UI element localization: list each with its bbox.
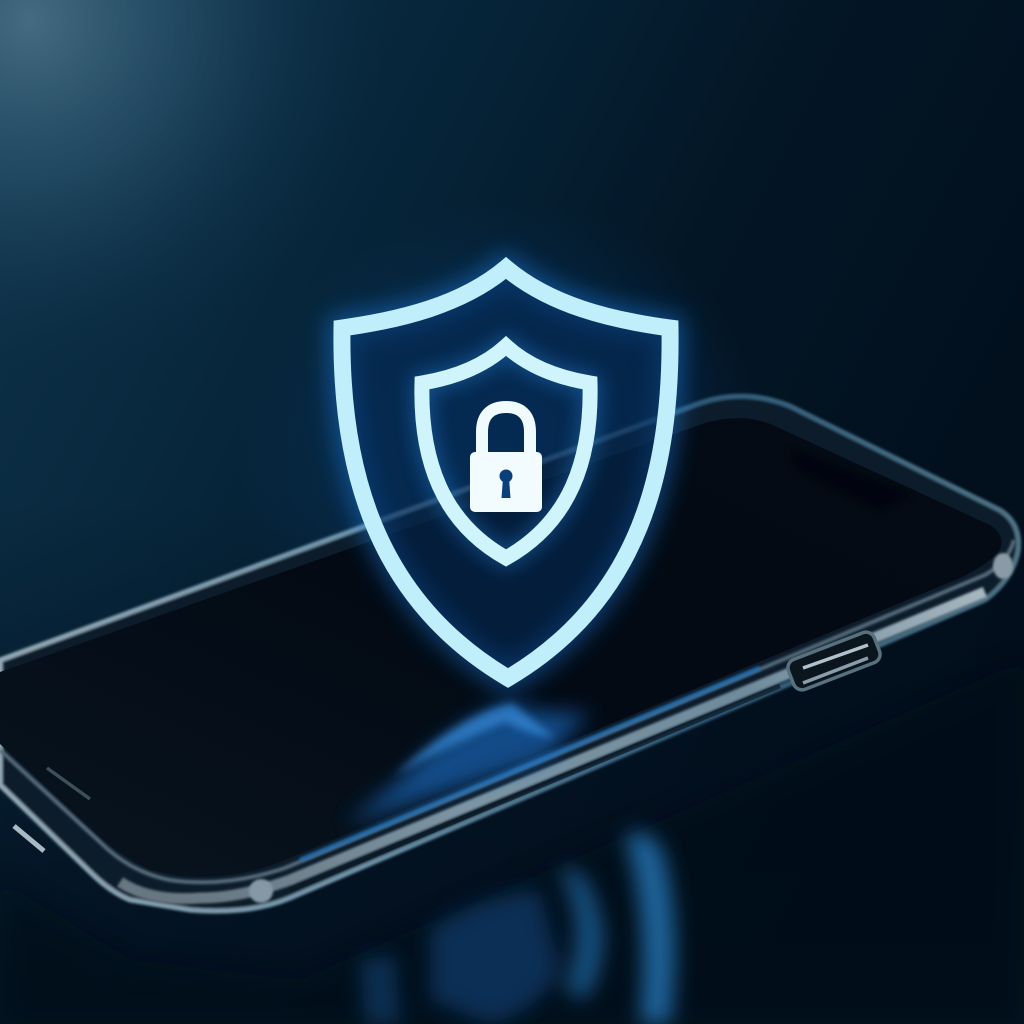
outer shield outline xyxy=(342,268,670,678)
table reflection of shield xyxy=(360,833,675,1024)
left ports xyxy=(14,768,90,851)
phone lower metal band xyxy=(120,592,985,899)
side button xyxy=(785,630,883,692)
padlock icon xyxy=(470,407,542,512)
phone side edge highlight xyxy=(0,540,1014,882)
phone shadow xyxy=(0,660,1024,1024)
screen shield reflection xyxy=(345,703,590,825)
inner shield glow xyxy=(422,346,590,558)
phone xyxy=(0,396,1024,1024)
notch shadow xyxy=(790,450,910,510)
metal joints xyxy=(249,553,1013,903)
phone blue rim glow xyxy=(300,668,760,860)
shield interior tint xyxy=(342,268,670,678)
phone body xyxy=(0,396,1019,911)
phone screen xyxy=(0,418,1002,877)
shield glow xyxy=(342,268,670,678)
glowing security shield xyxy=(342,268,670,678)
inner shield outline xyxy=(422,346,590,558)
